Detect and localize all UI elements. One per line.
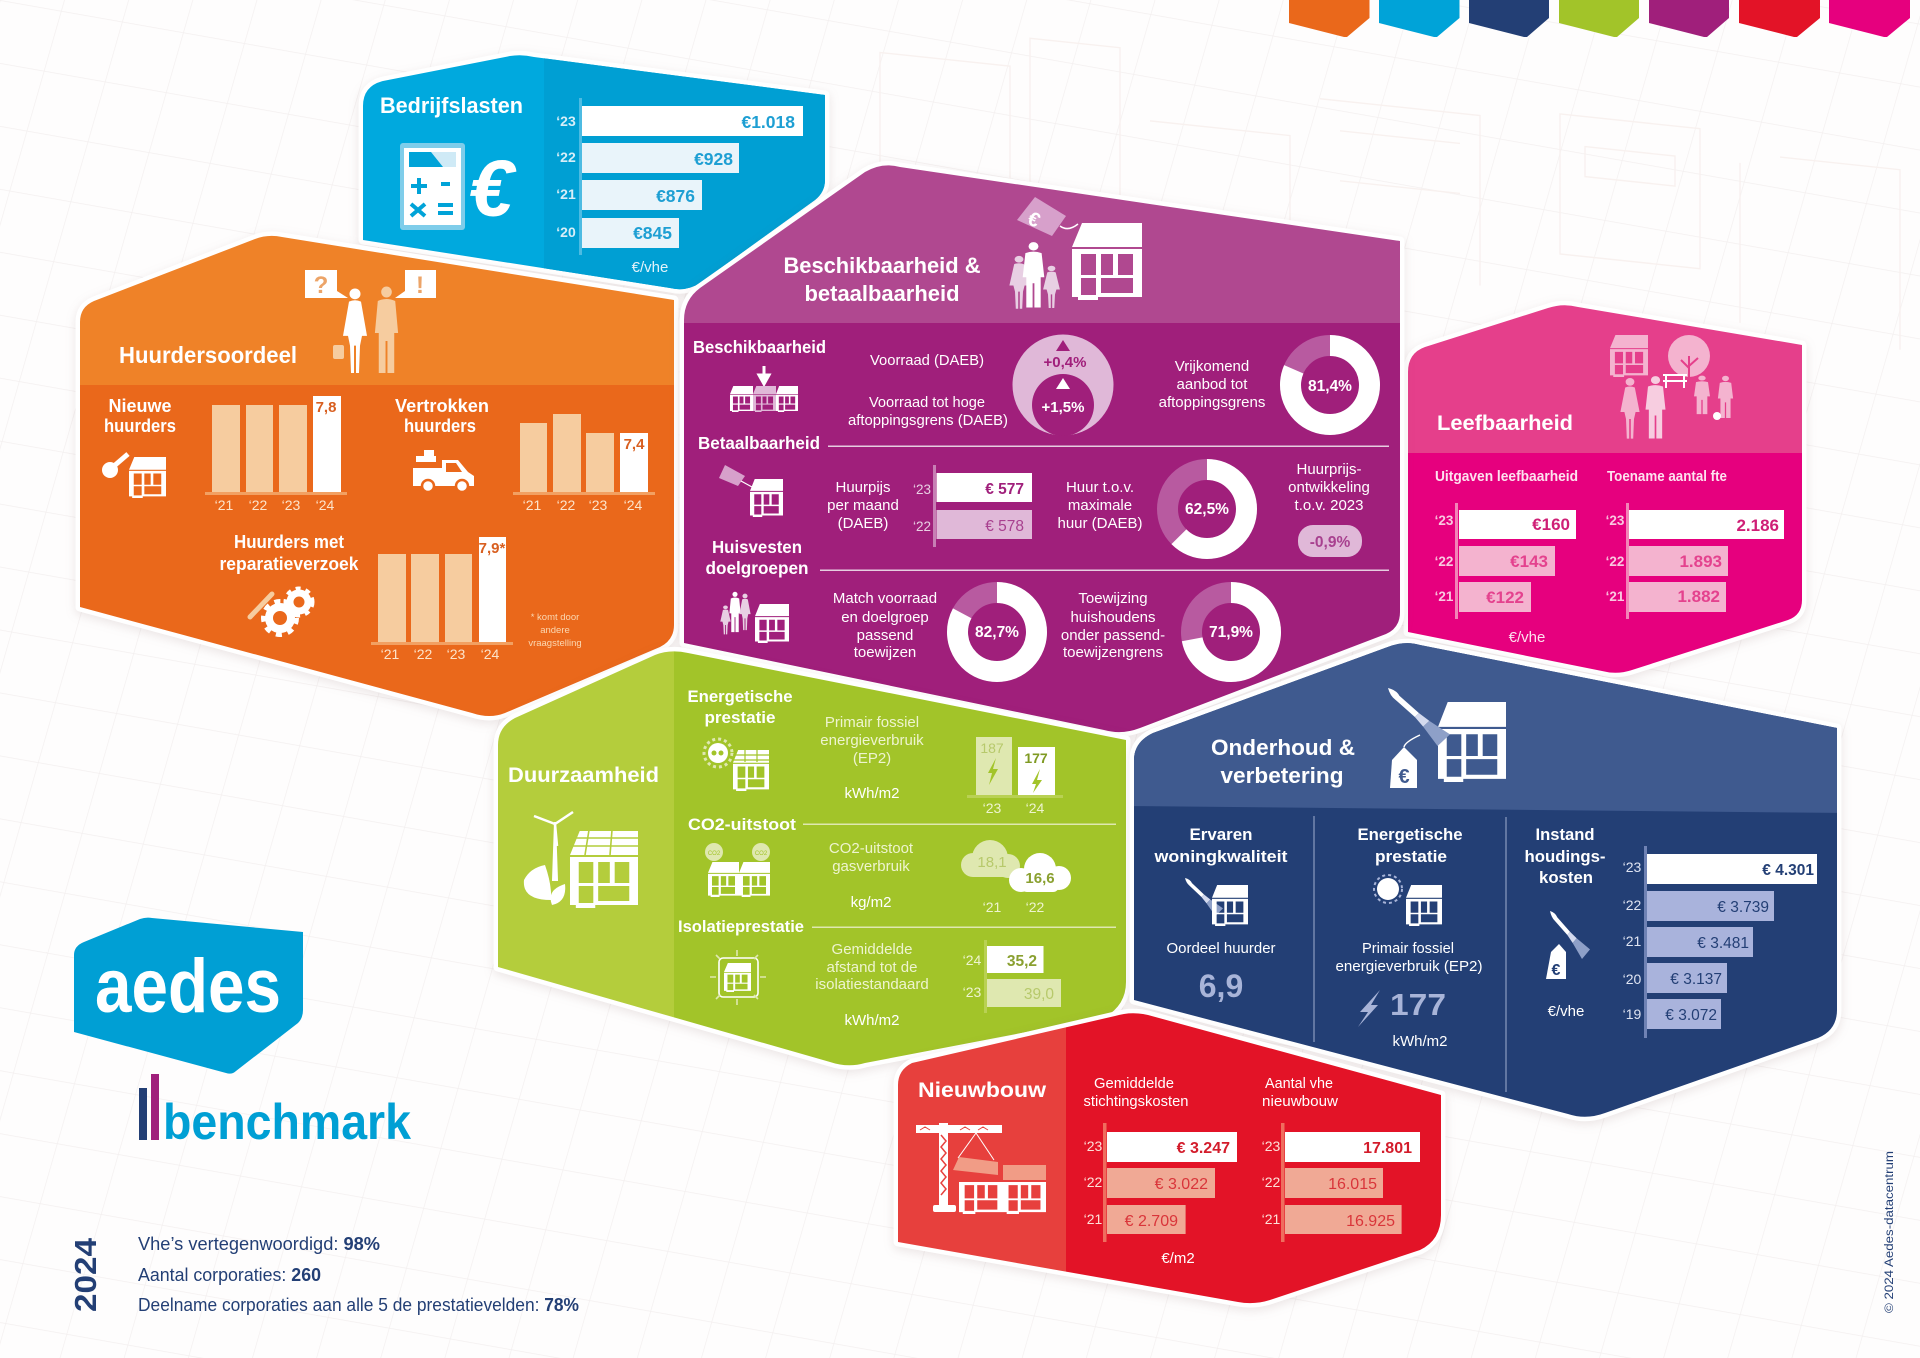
bar chart: bedrijfslasten per vhe: ‘23	[556, 113, 576, 129]
sub-chart: Vertrokken huurders	[395, 396, 655, 513]
icon: two tenants with speech bubbles: ?	[314, 272, 328, 299]
sub-chart: Huurders met reparatieverzoek: Huurders met	[234, 532, 344, 552]
section: CO2-uitstoot: CO2	[708, 851, 721, 857]
donut: 62,5%: 62,5%	[1185, 501, 1229, 518]
chart: CO2 clouds	[961, 840, 1071, 915]
icon: wind turbine, leaves and solar house	[524, 812, 640, 908]
section: CO2-uitstoot: kg/m2	[851, 894, 891, 911]
column: Instandhoudingskosten: Instand	[1536, 825, 1594, 844]
sub-chart: Nieuwe huurders: ‘22	[249, 497, 268, 513]
bar chart: EP2	[967, 737, 1063, 816]
section: Isolatieprestatie: isolatiestandaard	[815, 976, 929, 993]
sub-chart: Huurders met reparatieverzoek: reparatieverzoek	[220, 554, 359, 574]
section: Huisvesten doelgroepen: toewijzen	[854, 644, 916, 661]
bar chart: instandhoudingskosten: ‘19	[1623, 1006, 1642, 1022]
column: Energetische prestatie: 177	[1390, 987, 1446, 1022]
bar chart: Aantal vhe nieuwbouw: ‘21	[1262, 1211, 1281, 1227]
heading: Onderhoud & verbetering: verbetering	[1220, 763, 1344, 788]
callout: huurprijsontwikkeling	[1298, 525, 1362, 557]
sub-chart: Huurders met reparatieverzoek: vraagstelling	[528, 638, 582, 649]
heading: Beschikbaarheid & betaalbaarheid: Beschikbaarheid &	[784, 253, 981, 278]
column: Instandhoudingskosten	[1524, 825, 1817, 1038]
section: Betaalbaarheid	[698, 433, 1389, 557]
bar chart: Aantal vhe nieuwbouw: Aantal vhe	[1265, 1075, 1333, 1092]
icon: neighbourhood	[1610, 335, 1733, 439]
bar chart: bedrijfslasten per vhe: €1.018	[741, 112, 795, 132]
section: CO2-uitstoot: CO2-uitstoot	[688, 815, 796, 834]
bar chart: bedrijfslasten per vhe: €845	[633, 223, 672, 243]
section: Beschikbaarheid: aanbod tot	[1177, 376, 1248, 393]
donut: 71,9%: 71,9%	[1209, 624, 1253, 641]
bar chart: Gemiddelde stichtingskosten: Gemiddelde	[1094, 1075, 1174, 1092]
bar chart: Uitgaven leefbaarheid: ‘22	[1435, 554, 1453, 569]
sub-chart: Vertrokken huurders: ‘24	[624, 497, 643, 513]
section: Beschikbaarheid: Voorraad (DAEB)	[870, 352, 984, 369]
bar chart: Toename aantal fte: 2.186	[1736, 516, 1779, 535]
chart: voorraad circles: +1,5%	[1042, 399, 1084, 416]
section: Huisvesten doelgroepen: Match voorraad	[833, 590, 937, 607]
bar chart: Aantal vhe nieuwbouw: 16.015	[1328, 1176, 1377, 1193]
text block: participation statistics: Deelname corporaties aan alle 5 de prestatievelden: 78%	[138, 1295, 579, 1315]
bar chart: Gemiddelde stichtingskosten: €/m2	[1161, 1250, 1195, 1267]
logo: aedes	[74, 918, 303, 1074]
sub-chart: Vertrokken huurders: 7,4	[624, 436, 645, 453]
bar chart: Toename aantal fte: ‘21	[1606, 589, 1625, 604]
panel: Nieuwbouw	[890, 1005, 1451, 1315]
sub-chart: Nieuwe huurders: ‘21	[215, 497, 234, 513]
column: Energetische prestatie: energieverbruik (EP2)	[1336, 958, 1482, 975]
bar chart: Toename aantal fte: 1.882	[1677, 587, 1720, 606]
sub-chart: Vertrokken huurders: ‘22	[557, 497, 576, 513]
bar chart: Gemiddelde stichtingskosten: stichtingskosten	[1084, 1093, 1188, 1110]
donut: 82,7%	[958, 592, 1036, 672]
heading: Huurdersoordeel: Huurdersoordeel	[119, 342, 297, 368]
bar chart: isolatie: 35,2	[1007, 953, 1037, 970]
bar chart: EP2: 187	[980, 740, 1004, 756]
section: CO2-uitstoot: CO2	[755, 851, 768, 857]
bar chart: bedrijfslasten per vhe: €876	[656, 186, 695, 206]
sub-chart: Vertrokken huurders: ‘21	[523, 497, 542, 513]
bar chart: huurpijs: ‘22	[913, 519, 931, 534]
panel: Beschikbaarheid en betaalbaarheid	[675, 150, 1410, 743]
icon: brush, tag and house: €	[1398, 766, 1410, 788]
bar chart: Aantal vhe nieuwbouw: ‘23	[1262, 1138, 1281, 1154]
section: Energetische prestatie: kWh/m2	[844, 785, 900, 802]
column: Instandhoudingskosten: houdings-	[1524, 847, 1606, 866]
column: Ervaren woningkwaliteit	[1153, 825, 1288, 1004]
section: Betaalbaarheid: t.o.v. 2023	[1295, 497, 1363, 514]
section: Energetische prestatie: (EP2)	[853, 750, 891, 767]
bar chart: Toename aantal fte: Toename aantal fte	[1607, 469, 1727, 485]
section: Huisvesten doelgroepen: Toewijzing	[1078, 590, 1148, 607]
icon: calculator and euro: €	[469, 144, 517, 233]
icon: calculator and euro	[400, 143, 517, 233]
bar chart: huurpijs: € 577	[985, 481, 1024, 498]
bar chart: Toename aantal fte: ‘23	[1606, 513, 1625, 528]
bar chart: isolatie: 39,0	[1024, 986, 1054, 1003]
bar chart: instandhoudingskosten: € 3.137	[1670, 971, 1722, 988]
bar chart: Uitgaven leefbaarheid: ‘21	[1435, 589, 1454, 604]
heading: Beschikbaarheid & betaalbaarheid	[784, 253, 981, 306]
section: CO2-uitstoot: CO2-uitstoot	[829, 840, 914, 857]
sub-chart: Huurders met reparatieverzoek: ‘21	[381, 646, 400, 662]
bar chart: instandhoudingskosten	[1623, 846, 1817, 1038]
bar chart: Gemiddelde stichtingskosten: € 3.247	[1177, 1140, 1230, 1157]
section: Isolatieprestatie: Isolatieprestatie	[678, 917, 804, 936]
bar chart: bedrijfslasten per vhe: ‘22	[556, 149, 576, 165]
bar chart: Aantal vhe nieuwbouw: nieuwbouw	[1262, 1093, 1338, 1110]
bar chart: Uitgaven leefbaarheid	[1435, 469, 1578, 646]
sub-chart: Huurders met reparatieverzoek	[220, 532, 582, 662]
section: Huisvesten doelgroepen: doelgroepen	[706, 558, 808, 578]
section: CO2-uitstoot	[688, 815, 1116, 915]
sub-chart: Vertrokken huurders: Vertrokken	[395, 396, 489, 416]
bar chart: Toename aantal fte: ‘22	[1606, 554, 1624, 569]
bar chart: isolatie: ‘23	[963, 984, 982, 1000]
icon: two tenants with speech bubbles	[305, 270, 436, 373]
donut: 62,5%	[1168, 470, 1246, 548]
sub-chart: Huurders met reparatieverzoek: ‘22	[414, 646, 433, 662]
sub-chart: Huurders met reparatieverzoek: ‘23	[447, 646, 466, 662]
chart: CO2 clouds: ‘22	[1026, 899, 1045, 915]
bar chart: isolatie	[963, 940, 1061, 1013]
callout: huurprijsontwikkeling: -0,9%	[1310, 534, 1350, 551]
column: Instandhoudingskosten: €/vhe	[1548, 1003, 1584, 1020]
chart: voorraad circles	[1012, 334, 1114, 436]
bar chart: bedrijfslasten per vhe: ‘20	[556, 224, 576, 240]
panel: Duurzaamheid	[490, 640, 1134, 1080]
heading: Leefbaarheid: Leefbaarheid	[1437, 412, 1573, 435]
bar chart: instandhoudingskosten: € 3.072	[1665, 1007, 1717, 1024]
section: Betaalbaarheid: per maand	[827, 497, 899, 514]
icon: family, price tag and house: €	[1024, 208, 1043, 232]
bar chart: Uitgaven leefbaarheid: €/vhe	[1509, 629, 1545, 646]
bar chart: Gemiddelde stichtingskosten: ‘23	[1084, 1138, 1103, 1154]
sub-chart: Vertrokken huurders: ‘23	[589, 497, 608, 513]
column: Instandhoudingskosten: kosten	[1539, 868, 1593, 887]
bar chart: bedrijfslasten per vhe	[556, 98, 803, 276]
bar chart: huurpijs	[913, 465, 1032, 547]
icon: brush, tag and house	[1388, 688, 1506, 788]
dividers	[1314, 816, 1506, 1092]
bar chart: instandhoudingskosten: € 3.481	[1697, 935, 1749, 952]
logo: benchmark: benchmark	[163, 1094, 411, 1150]
section: Beschikbaarheid: aftoppingsgrens	[1159, 394, 1265, 411]
heading: Duurzaamheid: Duurzaamheid	[508, 764, 659, 787]
section: Beschikbaarheid: Beschikbaarheid	[693, 337, 826, 357]
section: Isolatieprestatie: Gemiddelde	[832, 941, 912, 958]
bar chart: Aantal vhe nieuwbouw: 16.925	[1346, 1213, 1395, 1230]
bar chart: bedrijfslasten per vhe: €/vhe	[632, 259, 668, 276]
section: Huisvesten doelgroepen: toewijzengrens	[1063, 644, 1163, 661]
section: Betaalbaarheid: Huurpijs	[835, 479, 891, 496]
copyright: © 2024 Aedes-datacentrum	[1884, 1151, 1896, 1313]
section: Energetische prestatie: energieverbruik	[820, 732, 924, 749]
text block: participation statistics: Aantal corporaties: 260	[138, 1265, 321, 1285]
bar chart: huurpijs: ‘23	[913, 482, 931, 497]
heading: Onderhoud & verbetering	[1211, 735, 1355, 788]
section: Energetische prestatie: Energetische	[688, 687, 792, 706]
section: Beschikbaarheid: Vrijkomend	[1175, 358, 1249, 375]
sub-chart: Huurders met reparatieverzoek: * komt door	[531, 612, 579, 623]
section: Betaalbaarheid: Huur t.o.v.	[1066, 479, 1134, 496]
bar chart: EP2: 177	[1024, 750, 1048, 766]
chart: CO2 clouds: 18,1	[977, 854, 1007, 871]
bar chart: Uitgaven leefbaarheid: €122	[1486, 588, 1524, 607]
bar chart: Gemiddelde stichtingskosten: ‘22	[1084, 1174, 1103, 1190]
column: Ervaren woningkwaliteit: Oordeel huurder	[1166, 940, 1276, 957]
donut: 81,4%: 81,4%	[1308, 378, 1352, 395]
heading: Beschikbaarheid & betaalbaarheid: betaalbaarheid	[804, 281, 960, 306]
chart: voorraad circles: +0,4%	[1044, 354, 1086, 371]
column: Energetische prestatie: Energetische	[1358, 825, 1462, 844]
bar chart: instandhoudingskosten: ‘21	[1623, 933, 1642, 949]
bar chart: Gemiddelde stichtingskosten	[1084, 1075, 1237, 1267]
section: Beschikbaarheid: aftoppingsgrens (DAEB)	[848, 412, 1008, 429]
column: Energetische prestatie: Primair fossiel	[1362, 940, 1454, 957]
column: Ervaren woningkwaliteit: 6,9	[1199, 968, 1243, 1004]
column: Energetische prestatie	[1336, 825, 1482, 1050]
column: Ervaren woningkwaliteit: woningkwaliteit	[1153, 847, 1288, 866]
bar chart: Uitgaven leefbaarheid: €160	[1532, 515, 1570, 534]
text block: participation statistics	[138, 1234, 579, 1315]
section: Betaalbaarheid: Betaalbaarheid	[698, 433, 820, 453]
bar chart: instandhoudingskosten: ‘22	[1623, 897, 1642, 913]
section: Isolatieprestatie: afstand tot de	[827, 959, 917, 976]
bar chart: huurpijs: € 578	[985, 518, 1024, 535]
bar chart: Uitgaven leefbaarheid: €143	[1510, 552, 1548, 571]
bar chart: Uitgaven leefbaarheid: ‘23	[1435, 513, 1454, 528]
bar chart: Gemiddelde stichtingskosten: € 2.709	[1125, 1213, 1178, 1230]
sub-chart: Nieuwe huurders: ‘23	[282, 497, 301, 513]
year: 2024: 2024	[68, 1237, 103, 1312]
section: Beschikbaarheid: Voorraad tot hoge	[869, 394, 985, 411]
sub-chart: Nieuwe huurders	[102, 396, 347, 513]
bar chart: bedrijfslasten per vhe: €928	[694, 149, 733, 169]
column: Instandhoudingskosten: €	[1552, 962, 1561, 979]
donut: 82,7%: 82,7%	[975, 624, 1019, 641]
bar chart: instandhoudingskosten: ‘20	[1623, 971, 1642, 987]
bar chart: Gemiddelde stichtingskosten: ‘21	[1084, 1211, 1103, 1227]
column: Energetische prestatie: kWh/m2	[1392, 1033, 1448, 1050]
bar chart: isolatie: ‘24	[963, 952, 982, 968]
section: Huisvesten doelgroepen	[706, 537, 1389, 672]
chart: CO2 clouds: ‘21	[983, 899, 1002, 915]
bar chart: bedrijfslasten per vhe: ‘21	[556, 186, 576, 202]
text block: participation statistics: Vhe’s vertegenwoordigd: 98%	[138, 1234, 380, 1254]
sub-chart: Nieuwe huurders: huurders	[104, 416, 176, 436]
section: Betaalbaarheid: maximale	[1068, 497, 1132, 514]
section: Betaalbaarheid: Huurprijs-	[1296, 461, 1362, 478]
section: CO2-uitstoot: gasverbruik	[832, 858, 910, 875]
chart: CO2 clouds: 16,6	[1025, 870, 1055, 887]
sub-chart: Nieuwe huurders: ‘24	[316, 497, 335, 513]
section: Energetische prestatie: prestatie	[704, 708, 776, 727]
bar chart: Gemiddelde stichtingskosten: € 3.022	[1155, 1176, 1208, 1193]
panel: Bedrijfslasten	[355, 50, 835, 300]
sub-chart: Huurders met reparatieverzoek: ‘24	[481, 646, 500, 662]
section: Huisvesten doelgroepen: Huisvesten	[712, 537, 802, 557]
section: Isolatieprestatie: kWh/m2	[844, 1012, 900, 1029]
section: Huisvesten doelgroepen: onder passend-	[1061, 627, 1165, 644]
section: Energetische prestatie	[688, 687, 1063, 816]
top colour tabs	[1289, 0, 1910, 37]
logo: aedes: aedes	[95, 944, 281, 1029]
donut: 71,9%	[1192, 592, 1270, 672]
sub-chart: Vertrokken huurders: huurders	[404, 416, 476, 436]
panel: Leefbaarheid	[1400, 295, 1810, 683]
icon: crane and houses	[916, 1123, 1046, 1214]
panel: Onderhoud en verbetering	[1125, 635, 1845, 1135]
section: Betaalbaarheid: ontwikkeling	[1288, 479, 1370, 496]
section: Huisvesten doelgroepen: en doelgroep	[841, 609, 929, 626]
bar chart: Uitgaven leefbaarheid: Uitgaven leefbaarheid	[1435, 469, 1578, 485]
bar chart: EP2: ‘24	[1026, 800, 1045, 816]
bar chart: Toename aantal fte: 1.893	[1679, 552, 1722, 571]
bar chart: instandhoudingskosten: € 3.739	[1717, 899, 1769, 916]
sub-chart: Nieuwe huurders: 7,8	[316, 399, 336, 416]
icon: two tenants with speech bubbles: !	[416, 272, 424, 299]
section: Huisvesten doelgroepen: huishoudens	[1070, 609, 1156, 626]
heading: Nieuwbouw: Nieuwbouw	[918, 1079, 1047, 1102]
section: Energetische prestatie: Primair fossiel	[825, 714, 919, 731]
bar chart: Aantal vhe nieuwbouw: 17.801	[1363, 1140, 1412, 1157]
heading: Onderhoud & verbetering: Onderhoud &	[1211, 735, 1355, 760]
panel: Huurdersoordeel	[70, 225, 690, 725]
section: Betaalbaarheid: (DAEB)	[838, 515, 888, 532]
section: Beschikbaarheid	[693, 334, 1370, 436]
sub-chart: Huurders met reparatieverzoek: 7,9*	[479, 540, 506, 557]
column: Energetische prestatie: prestatie	[1375, 847, 1447, 866]
sub-chart: Nieuwe huurders: Nieuwe	[108, 396, 172, 416]
bar chart: Aantal vhe nieuwbouw: ‘22	[1262, 1174, 1281, 1190]
logo: benchmark	[139, 1074, 411, 1150]
bar chart: EP2: ‘23	[983, 800, 1002, 816]
section: Isolatieprestatie	[678, 917, 1116, 1029]
sub-chart: Huurders met reparatieverzoek: andere	[540, 625, 570, 636]
donut: 81,4%	[1290, 346, 1370, 424]
section: Betaalbaarheid: huur (DAEB)	[1057, 515, 1143, 532]
bar chart: Toename aantal fte	[1606, 469, 1784, 619]
bar chart: instandhoudingskosten: € 4.301	[1762, 862, 1814, 879]
bar chart: instandhoudingskosten: ‘23	[1623, 859, 1642, 875]
heading: Bedrijfslasten: Bedrijfslasten	[380, 93, 523, 118]
column: Ervaren woningkwaliteit: Ervaren	[1190, 825, 1252, 844]
section: Huisvesten doelgroepen: passend	[857, 627, 913, 644]
bar chart: Aantal vhe nieuwbouw	[1262, 1075, 1420, 1242]
icon: family, price tag and house	[1009, 197, 1142, 309]
